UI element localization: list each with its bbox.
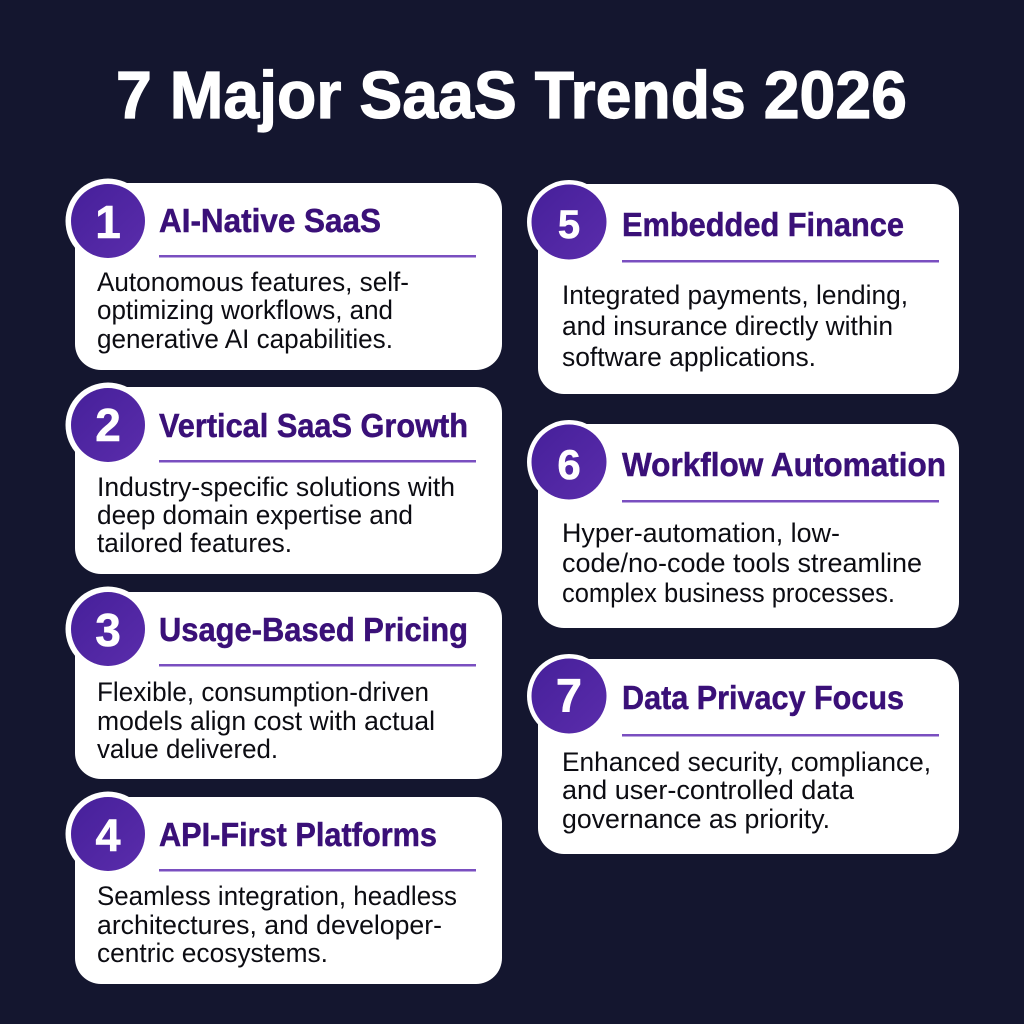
- panel: trend 1 AI-Native SaaS: [66, 178, 502, 370]
- panel: trend 6 Workflow Automation: [527, 420, 959, 628]
- text: trend 5 description: software applications.: [562, 342, 816, 372]
- heading: Usage-Based Pricing: Usage-Based Pricing: [159, 611, 468, 648]
- icon: number 2 badge: [71, 388, 145, 462]
- panel: trend 5 Embedded Finance: [527, 180, 959, 394]
- text: trend 2 description: tailored features.: [97, 528, 292, 558]
- text: trend 2 description: Industry-specific solutions with: [97, 472, 455, 502]
- heading: API-First Platforms: API-First Platforms: [159, 816, 437, 853]
- text: trend 1 description: [97, 267, 409, 354]
- text: trend 6 description: [562, 518, 922, 608]
- text: trend 5 description: [562, 280, 908, 372]
- text: trend 1 description: optimizing workflows, and: [97, 295, 393, 325]
- text: trend 4 description: [97, 881, 457, 968]
- text: trend 5 description: Integrated payments, lending,: [562, 280, 908, 310]
- text: trend 4 description: architectures, and developer-: [97, 910, 442, 940]
- panel: trend 7 Data Privacy Focus: [527, 654, 959, 854]
- text: trend 7 description: Enhanced security, compliance,: [562, 747, 931, 777]
- icon: number 7 badge: [532, 658, 606, 734]
- text: trend 7 description: [562, 747, 931, 834]
- text: trend 4 description: Seamless integration, headless: [97, 881, 457, 911]
- heading: Vertical SaaS Growth: Vertical SaaS Growth: [159, 407, 468, 444]
- text: trend 1 description: Autonomous features, self-: [97, 267, 409, 297]
- text: trend 6 description: complex business processes.: [562, 578, 895, 608]
- text: trend 4 description: centric ecosystems.: [97, 938, 328, 968]
- text: trend 7 description: and user-controlled data: [562, 775, 855, 805]
- text: trend 7 description: governance as priority.: [562, 804, 830, 834]
- heading: Workflow Automation: Workflow Automation: [622, 446, 946, 483]
- text: trend 2 description: deep domain expertise and: [97, 500, 413, 530]
- icon: number 2 badge: 2: [95, 399, 121, 451]
- text: trend 3 description: models align cost with actual: [97, 706, 435, 736]
- text: trend 5 description: and insurance directly within: [562, 311, 893, 341]
- icon: number 4 badge: [71, 797, 145, 871]
- panel: trend 3 Usage-Based Pricing: [66, 586, 502, 779]
- text: trend 1 description: generative AI capabilities.: [97, 324, 393, 354]
- icon: number 1 badge: 1: [95, 196, 121, 248]
- icon: number 6 badge: [532, 424, 606, 500]
- text: trend 6 description: code/no-code tools streamline: [562, 548, 922, 578]
- icon: number 5 badge: 5: [558, 203, 580, 247]
- text: trend 3 description: value delivered.: [97, 734, 278, 764]
- title: 7 Major SaaS Trends 2026: [116, 58, 907, 133]
- text: trend 6 description: Hyper-automation, low-: [562, 518, 840, 548]
- icon: number 4 badge: 4: [95, 810, 121, 861]
- panel: trend 2 Vertical SaaS Growth: [66, 382, 502, 574]
- text: trend 3 description: [97, 677, 435, 764]
- icon: number 3 badge: [71, 592, 145, 666]
- panel: trend 4 API-First Platforms: [66, 792, 502, 984]
- icon: number 1 badge: [71, 184, 145, 258]
- icon: number 3 badge: 3: [95, 604, 121, 656]
- text: trend 3 description: Flexible, consumption-driven: [97, 677, 429, 707]
- icon: number 6 badge: 6: [557, 441, 581, 488]
- icon: number 5 badge: [532, 184, 606, 260]
- heading: AI-Native SaaS: AI-Native SaaS: [159, 202, 381, 239]
- icon: number 7 badge: 7: [556, 669, 582, 722]
- text: trend 2 description: [97, 472, 455, 558]
- heading: Data Privacy Focus: Data Privacy Focus: [622, 679, 904, 716]
- heading: Embedded Finance: Embedded Finance: [622, 206, 904, 243]
